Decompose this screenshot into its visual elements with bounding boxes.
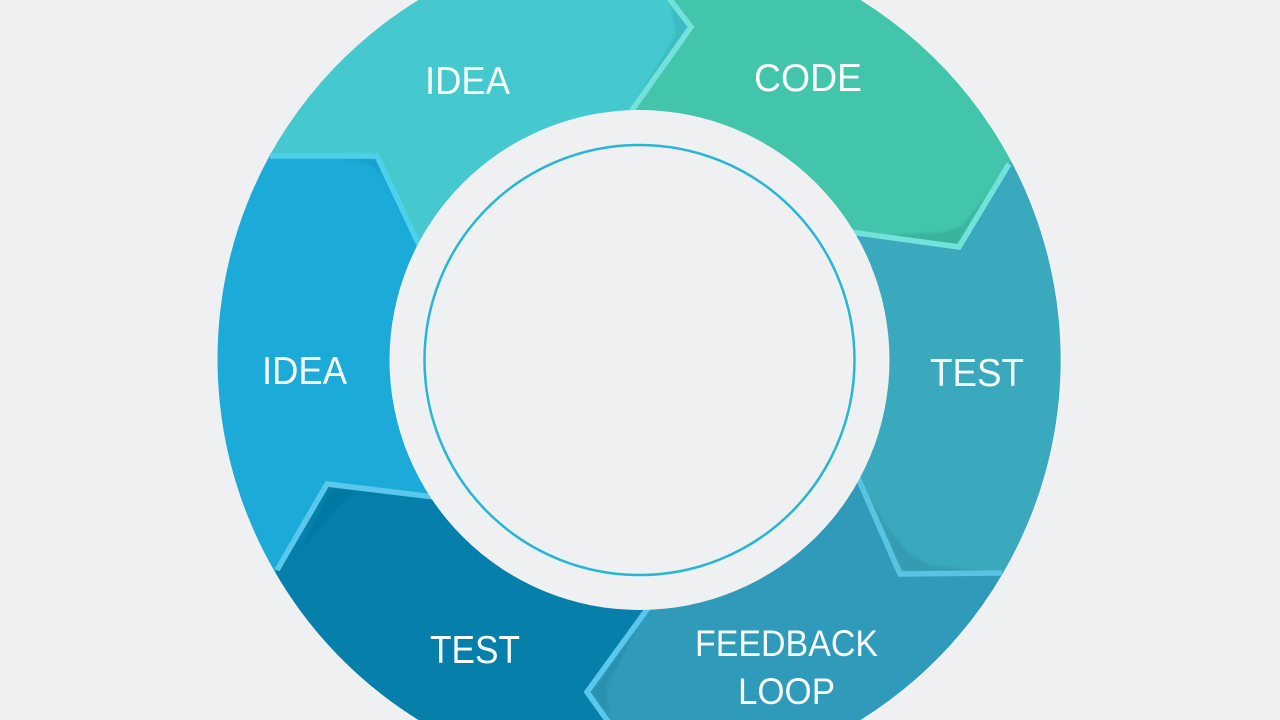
- inner circle outline: [424, 145, 854, 575]
- segment: CODE: [632, 0, 1011, 360]
- label: FEEDBACK LOOP: FEEDBACK: [695, 623, 878, 664]
- cycle diagram: [218, 0, 1061, 720]
- central ring: [390, 110, 890, 610]
- label: IDEA: IDEA: [262, 350, 347, 393]
- segment: IDEA (left): [218, 155, 640, 572]
- label: TEST: TEST: [430, 629, 520, 672]
- segment: TEST (bottom): [275, 360, 645, 720]
- label: TEST: TEST: [930, 352, 1024, 395]
- segment: IDEA (top): [270, 0, 693, 360]
- segment: FEEDBACK LOOP: [585, 360, 1003, 720]
- label: FEEDBACK LOOP: LOOP: [738, 671, 835, 712]
- label: CODE: CODE: [754, 57, 862, 100]
- segment: TEST (right): [640, 161, 1061, 575]
- arrow edges between segments: [270, 0, 1009, 720]
- label: IDEA: IDEA: [425, 60, 510, 103]
